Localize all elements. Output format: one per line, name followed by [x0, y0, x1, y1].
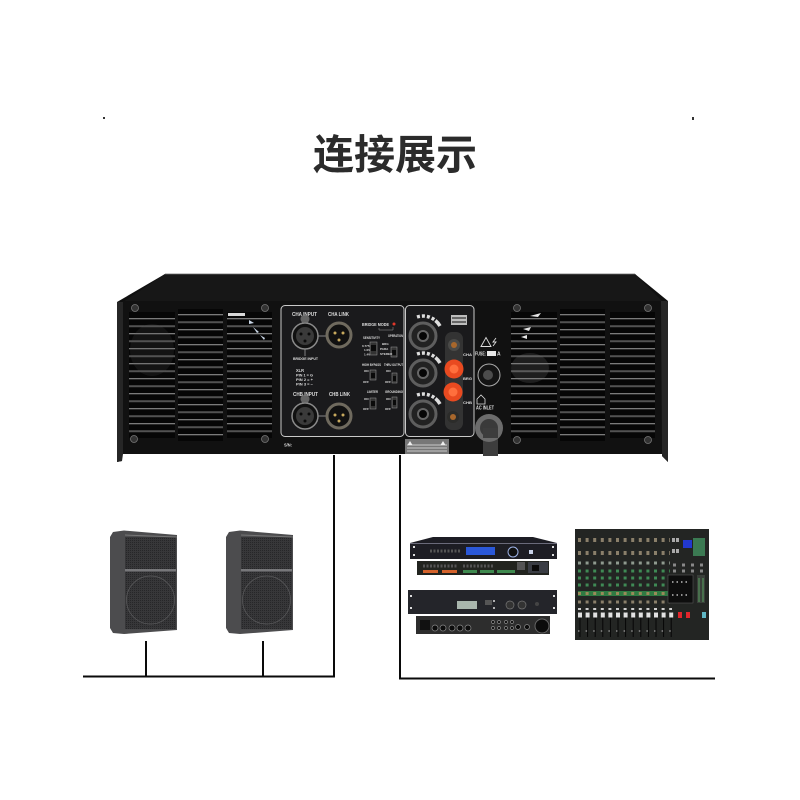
XLR pin legend	[296, 368, 314, 386]
panel: input connectors	[281, 306, 404, 436]
switch labels	[362, 334, 404, 411]
mixer master section	[668, 538, 705, 603]
connector labels: CHB LINK	[329, 392, 350, 398]
switch labels: OFF	[385, 380, 391, 384]
title: 连接展示	[313, 132, 477, 178]
switch labels: LIMITER	[367, 390, 378, 394]
fuse label: A	[497, 352, 501, 358]
switch labels: BRG	[382, 342, 389, 346]
connector labels: BRIDGE INPUT	[293, 356, 318, 361]
device: processor 1 front	[410, 537, 557, 559]
AC inlet connector	[478, 364, 500, 386]
house icon	[477, 395, 485, 404]
output notice	[451, 315, 467, 325]
connector labels: CHB INPUT	[293, 392, 318, 398]
binding post labels: CHA	[463, 352, 472, 357]
switch labels: 1.0V	[364, 348, 370, 352]
mixer faders	[578, 609, 706, 637]
mixer green band	[578, 591, 668, 596]
switch labels: GROUNDING	[385, 390, 403, 394]
switch labels: ON	[386, 369, 390, 373]
speaker: right	[226, 530, 293, 634]
switch labels: 1.4V	[364, 352, 370, 356]
mixer input knobs	[578, 540, 670, 602]
wiring: source line	[400, 455, 715, 678]
XLR pin legend: PIN 3 = −	[296, 382, 314, 386]
amplifier chassis	[117, 274, 668, 462]
right vent	[511, 309, 655, 441]
connector labels	[292, 312, 350, 398]
switch labels: SENSITIVITY	[363, 336, 381, 340]
binding post strip	[445, 332, 463, 430]
left vent	[129, 309, 272, 441]
switch labels: ON	[386, 397, 390, 401]
device: processor 1 rear	[417, 561, 549, 575]
binding post labels	[463, 352, 472, 405]
corner mark: right	[692, 117, 694, 120]
device: processor 2 front	[408, 590, 557, 614]
speakon outputs	[410, 323, 436, 427]
warning label	[405, 439, 449, 454]
power cable	[475, 414, 503, 456]
serial label: S/N:	[284, 442, 292, 448]
switch labels: PARA	[380, 347, 389, 351]
fuse label: FUSE:	[475, 352, 486, 358]
fuse label	[475, 351, 501, 358]
panel: output connectors	[406, 306, 474, 436]
AC inlet label: AC INLET	[476, 406, 494, 412]
XLR pin legend: XLR	[296, 368, 305, 373]
warning triangle icon	[481, 338, 491, 346]
switch labels: OFF	[385, 407, 391, 411]
XLR pin legend: PIN 1 = G	[296, 372, 313, 378]
lightning icon	[493, 338, 496, 346]
switch labels: STEREO	[380, 352, 393, 356]
wiring: speaker line	[83, 455, 334, 676]
switch labels: 0.775	[362, 344, 370, 348]
switches	[370, 342, 397, 409]
binding post labels: BRG	[463, 376, 472, 381]
switch labels: ON	[364, 397, 368, 401]
XLR pin legend: PIN 2 = +	[296, 377, 314, 382]
binding post labels: CHB	[463, 400, 472, 405]
XLR connectors	[292, 314, 351, 429]
output arcs	[417, 316, 440, 404]
switch labels: OFF	[363, 380, 369, 384]
switch labels: ON	[364, 369, 368, 373]
speaker: left	[110, 530, 177, 634]
connector labels: CHA INPUT	[292, 312, 317, 318]
switch labels: OFF	[363, 407, 369, 411]
amplifier rear	[117, 274, 668, 462]
switch labels: THRU OUTPUT	[384, 363, 404, 367]
switch labels: HIGH BYPASS	[362, 363, 382, 367]
corner mark: left	[103, 117, 105, 119]
device: mixing console	[575, 529, 709, 640]
mounting screws	[130, 304, 652, 444]
switch labels: OPERATION	[388, 334, 403, 338]
binding posts	[444, 339, 464, 423]
connector labels: CHA LINK	[328, 312, 349, 318]
bridge mode label: BRIDGE MODE	[362, 322, 389, 327]
device: processor 2 rear	[416, 616, 550, 634]
